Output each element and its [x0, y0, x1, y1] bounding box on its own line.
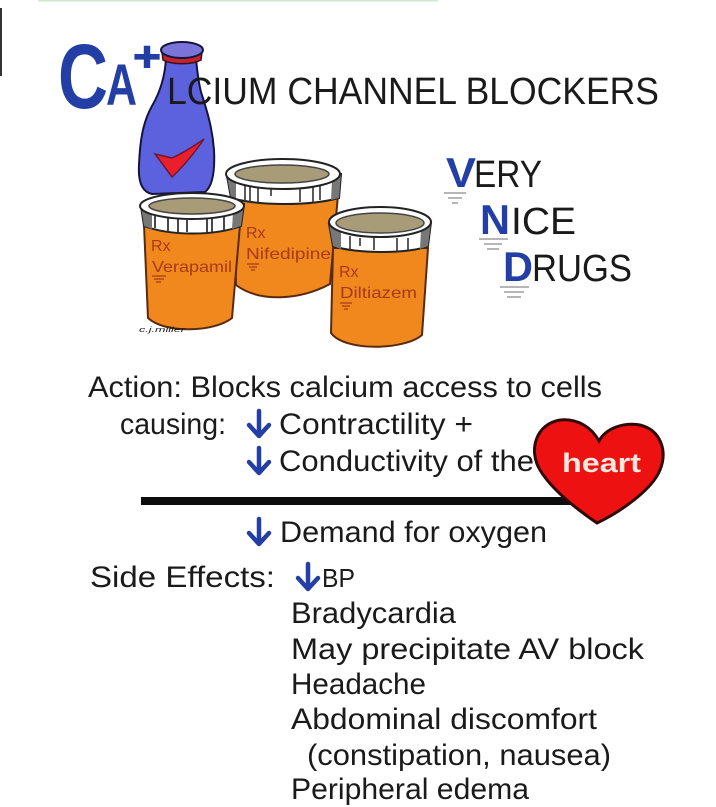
mnemonic line: NICE: ICE: [511, 201, 576, 243]
side effects list: [291, 563, 645, 806]
title: CA+ in blue: A: [106, 53, 137, 118]
icon: red heart: [534, 420, 663, 523]
title: CA+ in blue: C: [58, 26, 108, 128]
icon: Verapamil jar: Verapamil: [152, 259, 232, 276]
action text block: causing:: [120, 408, 226, 441]
mnemonic line: VERY: [444, 149, 542, 203]
side effects list: BP: [322, 563, 355, 593]
icon: red heart: heart: [562, 448, 641, 478]
mnemonic line: VERY: V: [446, 149, 476, 196]
action text block: Action: Blocks calcium access to cells: [88, 371, 602, 404]
side effects list: Peripheral edema: [291, 773, 529, 806]
icon: blue bottle: [139, 42, 214, 194]
arrow: decreased BP: [298, 564, 318, 589]
title: LCIUM CHANNEL BLOCKERS: LCIUM CHANNEL BLOCKERS: [167, 71, 659, 113]
title: CA+ in blue: [58, 26, 161, 128]
mnemonic: Very Nice Drugs: [444, 149, 632, 297]
divider bar: [141, 497, 571, 505]
icon: Nifedipine jar: [226, 159, 341, 297]
action text block: Contractility +: [279, 408, 473, 441]
side effects list: May precipitate AV block: [291, 633, 645, 666]
side effects list: (constipation, nausea): [307, 739, 611, 772]
icon: Verapamil jar: Rx: [151, 238, 171, 255]
icon: Nifedipine jar: Rx: [246, 225, 266, 242]
icon: Verapamil jar: c.j.miller: [139, 327, 186, 334]
mnemonic line: DRUGS: D: [503, 243, 533, 290]
icon: Diltiazem jar: [329, 207, 431, 347]
icon: Diltiazem jar: Rx: [339, 264, 359, 281]
side effects list: Headache: [291, 668, 426, 701]
mnemonic line: NICE: [479, 196, 576, 249]
side effects list: Abdominal discomfort: [291, 703, 598, 736]
title: CA+ in blue: +: [133, 33, 161, 80]
side effects heading: Side Effects:: [90, 561, 275, 594]
mnemonic line: VERY: ERY: [474, 154, 542, 196]
icon: Diltiazem jar: Diltiazem: [340, 285, 417, 302]
icon: Nifedipine jar: Nifedipine: [246, 246, 331, 263]
mnemonic line: DRUGS: RUGS: [532, 248, 632, 290]
arrow: decreased conductivity: [249, 448, 269, 473]
action text block: Conductivity of the: [279, 445, 534, 478]
mnemonic line: NICE: N: [480, 196, 510, 243]
side effects block: [90, 561, 645, 806]
icon: Verapamil jar: [139, 193, 244, 334]
mnemonic line: DRUGS: [500, 243, 632, 297]
text: demand for oxygen: Demand for oxygen: [280, 516, 547, 549]
arrow: decreased demand: [249, 519, 269, 544]
action text block: [88, 371, 602, 478]
side effects list: Bradycardia: [291, 597, 456, 630]
arrow: decreased contractility: [249, 411, 269, 436]
